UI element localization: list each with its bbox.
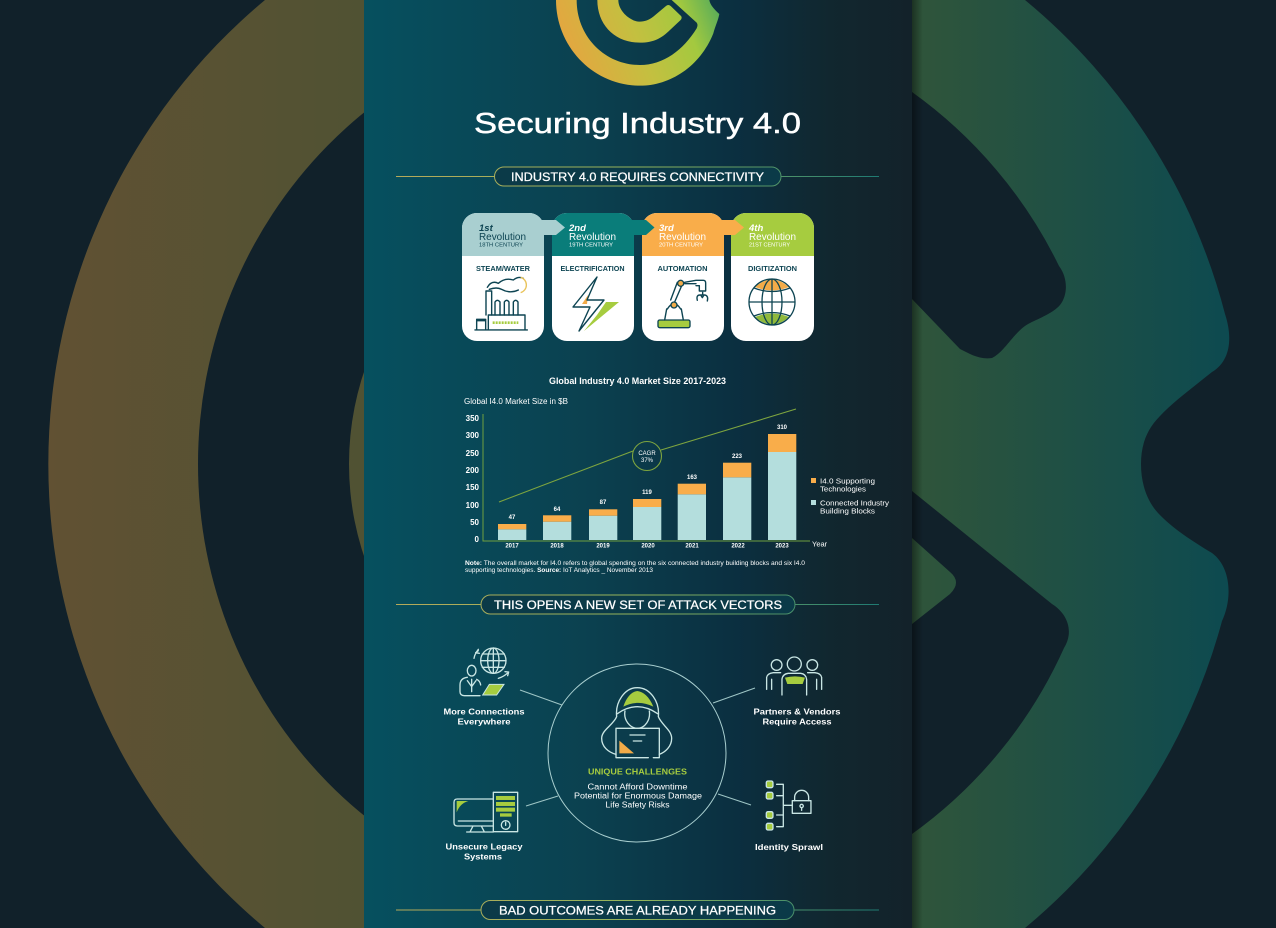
card: 2nd revolution — [552, 213, 654, 341]
icon: partners and vendors — [767, 657, 822, 695]
connector lines — [520, 688, 755, 806]
bar chart: market size: 2023 — [775, 544, 789, 550]
icon: lightning bolt — [573, 277, 619, 331]
legend — [811, 476, 889, 516]
bar chart: market size: 100 — [466, 501, 480, 510]
bar chart: market size: 350 — [466, 414, 480, 423]
icon: legacy computer — [454, 792, 518, 832]
heading: this opens a new set of attack vectors: THIS OPENS A NEW SET OF ATTACK VECTORS — [494, 598, 782, 612]
card: 4th revolution: 21ST CENTURY — [749, 242, 790, 248]
bar chart: market size: 163 — [687, 475, 698, 481]
bar chart: market size: 0 — [475, 535, 480, 544]
heading: this opens a new set of attack vectors — [396, 595, 879, 614]
unique challenges text: Cannot Afford Downtime — [588, 782, 688, 792]
label: partners and vendors: Require Access — [762, 716, 832, 726]
legend: Technologies — [820, 484, 866, 494]
bar chart: market size: 2017 — [505, 544, 519, 550]
bar chart: market size: 2020 — [641, 544, 655, 550]
card: 1st revolution: Revolution — [479, 232, 526, 243]
legend: Connected Industry — [820, 498, 889, 508]
card: 1st revolution: 18TH CENTURY — [479, 242, 523, 248]
card: 4th revolution: DIGITIZATION — [748, 266, 797, 273]
icon: robot arm — [658, 280, 708, 328]
label: unsecure legacy systems: Unsecure Legacy — [446, 842, 523, 852]
unique challenges circle — [548, 664, 726, 842]
label: more connections everywhere — [444, 706, 525, 726]
legend: I4.0 Supporting — [820, 476, 875, 486]
bar chart: market size: 2021 — [685, 544, 699, 550]
icon: hacker — [602, 688, 672, 758]
bar chart: market size: 310 — [777, 425, 788, 431]
heading: industry 4.0 requires connectivity — [396, 167, 879, 186]
bar chart: market size: 300 — [466, 431, 480, 440]
unique challenges text: Potential for Enormous Damage — [574, 792, 703, 800]
icon: factory — [475, 277, 527, 330]
title: Securing Industry 4.0 — [474, 108, 801, 140]
label: unsecure legacy systems: Systems — [464, 852, 502, 862]
card: 3rd revolution: 20TH CENTURY — [659, 242, 703, 248]
legend: Building Blocks — [820, 506, 875, 516]
card: 4th revolution: Revolution — [749, 232, 796, 243]
card: 2nd revolution: 19TH CENTURY — [569, 242, 613, 248]
heading: industry 4.0 requires connectivity: INDUSTRY 4.0 REQUIRES CONNECTIVITY — [511, 170, 764, 184]
card: 2nd revolution: 2nd — [568, 223, 586, 234]
card: 4th revolution — [731, 213, 814, 341]
icon: identity sprawl — [766, 781, 811, 830]
panel: infographic column — [364, 0, 923, 928]
bar chart: market size — [464, 397, 889, 550]
label: more connections everywhere: More Connections — [444, 706, 525, 716]
bar chart: market size: 250 — [466, 449, 480, 458]
bar chart: market size: 223 — [732, 454, 743, 460]
chart title: Global Industry 4.0 Market Size 2017-2023 — [549, 376, 726, 386]
card: 1st revolution: STEAM/WATER — [476, 266, 530, 273]
bar chart: market size: 2018 — [550, 544, 564, 550]
bar chart: market size: 50 — [470, 518, 480, 527]
card: 3rd revolution — [642, 213, 744, 341]
bar chart: market size: 47 — [509, 515, 516, 521]
label: more connections everywhere: Everywhere — [458, 716, 511, 726]
bar chart: market size: Year — [812, 540, 828, 548]
trend line with CAGR badge: 37% — [641, 458, 654, 464]
bar chart: market size: 150 — [466, 483, 480, 492]
bar chart: market size: 64 — [554, 507, 561, 513]
label: identity sprawl: Identity Sprawl — [755, 842, 823, 852]
label: partners and vendors — [754, 706, 841, 726]
unique challenges text: Life Safety Risks — [606, 800, 670, 810]
heading: bad outcomes are already happening — [396, 900, 879, 920]
heading: bad outcomes are already happening: BAD OUTCOMES ARE ALREADY HAPPENING — [499, 904, 776, 918]
icon: connected worker — [460, 648, 509, 696]
unique challenges text — [574, 766, 703, 810]
bar chart: market size: 2022 — [731, 544, 745, 550]
bar chart: market size: 87 — [600, 500, 607, 506]
bar chart: market size: 2019 — [596, 544, 610, 550]
card: 3rd revolution: Revolution — [659, 232, 706, 243]
card: 2nd revolution: Revolution — [569, 232, 616, 243]
card: 1st revolution — [462, 213, 565, 341]
bar chart: market size: 200 — [466, 466, 480, 475]
label: unsecure legacy systems — [446, 842, 523, 862]
trend line with CAGR badge: CAGR — [638, 451, 656, 457]
card: 4th revolution: 4th — [748, 223, 763, 234]
label: partners and vendors: Partners & Vendors — [754, 706, 841, 716]
panel: four revolutions — [462, 213, 814, 341]
panel: attack vectors — [444, 648, 841, 862]
card: 1st revolution: 1st — [479, 223, 494, 234]
card: 3rd revolution: AUTOMATION — [658, 266, 708, 273]
chart note — [465, 561, 806, 574]
bar chart: market size: Global I4.0 Market Size in $B — [464, 397, 568, 406]
chart note: Note: The overall market for I4.0 refers to global spending on the six connected industry building blocks and six I4.0 — [465, 561, 806, 567]
icon: logo — [556, 0, 719, 86]
bar chart: market size: 119 — [642, 490, 652, 496]
card: 2nd revolution: ELECTRIFICATION — [560, 266, 624, 273]
unique challenges text: UNIQUE CHALLENGES — [588, 766, 688, 776]
chart note: supporting technologies. Source: IoT Analytics _ November 2013 — [465, 568, 654, 574]
trend line with CAGR badge — [499, 409, 796, 502]
card: 3rd revolution: 3rd — [659, 223, 674, 234]
icon: globe — [749, 279, 795, 325]
